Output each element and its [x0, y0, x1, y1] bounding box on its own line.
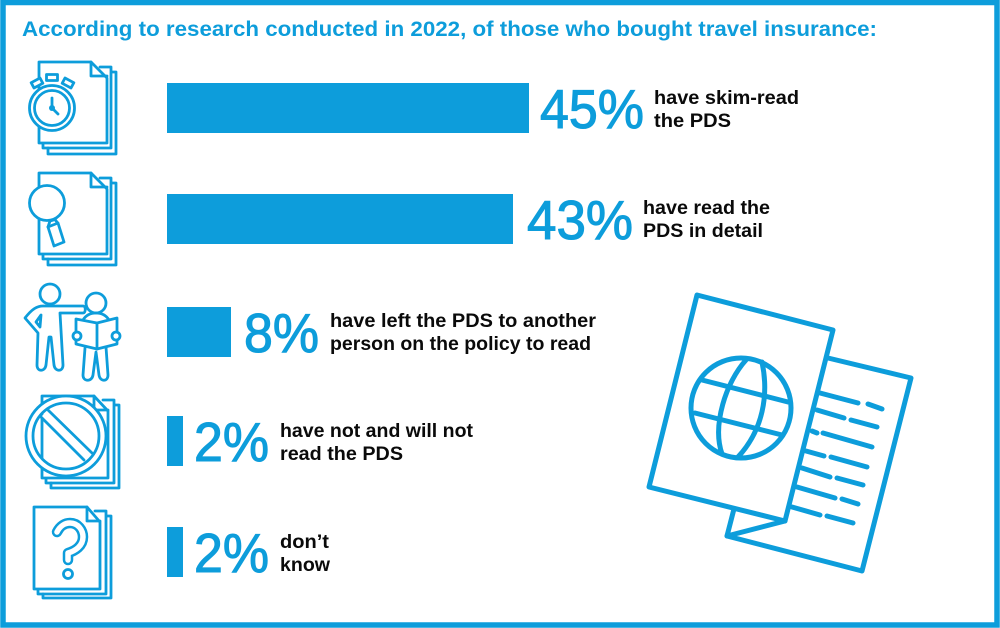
title: According to research conducted in 2022, of those who bought travel insurance:	[22, 18, 877, 41]
icon: magnifier on document stack	[30, 173, 116, 265]
row: 8% left to another person	[167, 302, 596, 364]
row: 43% have read in detail: have read the	[643, 197, 770, 219]
row: 45% have skim-read: 45%	[540, 78, 644, 140]
icon: question mark on document stack	[34, 507, 111, 598]
row: 2% have not and will not: 2%	[194, 411, 269, 473]
row: 2% don't know	[167, 522, 331, 584]
row: 2% have not and will not: read the PDS	[280, 443, 403, 465]
row: 43% have read in detail: 43%	[527, 189, 633, 251]
icon: prohibition sign on document stack	[26, 396, 119, 488]
icon: two people with a book	[25, 284, 120, 380]
icon: stopwatch on document stack	[30, 62, 116, 154]
back document	[727, 358, 911, 571]
row: 45% have skim-read: the PDS	[654, 110, 731, 132]
passport with globe	[649, 295, 833, 521]
row: 2% have not and will not: have not and will not	[280, 420, 474, 442]
row: 45% have skim-read	[167, 78, 799, 140]
row: 43% have read in detail: PDS in detail	[643, 220, 763, 242]
row: 2% don't know: 2%	[194, 522, 269, 584]
row: 45% have skim-read: have skim-read	[654, 87, 799, 109]
row: 2% have not and will not	[167, 411, 474, 473]
row: 8% left to another person: have left the PDS to another	[330, 310, 596, 332]
row: 2% don't know: don’t	[280, 531, 330, 553]
row: 43% have read in detail	[167, 189, 770, 251]
row: 2% don't know: know	[280, 554, 331, 576]
row: 8% left to another person: 8%	[244, 302, 319, 364]
row: 8% left to another person: person on the policy to read	[330, 333, 591, 355]
icon: passport and document illustration	[649, 295, 911, 571]
